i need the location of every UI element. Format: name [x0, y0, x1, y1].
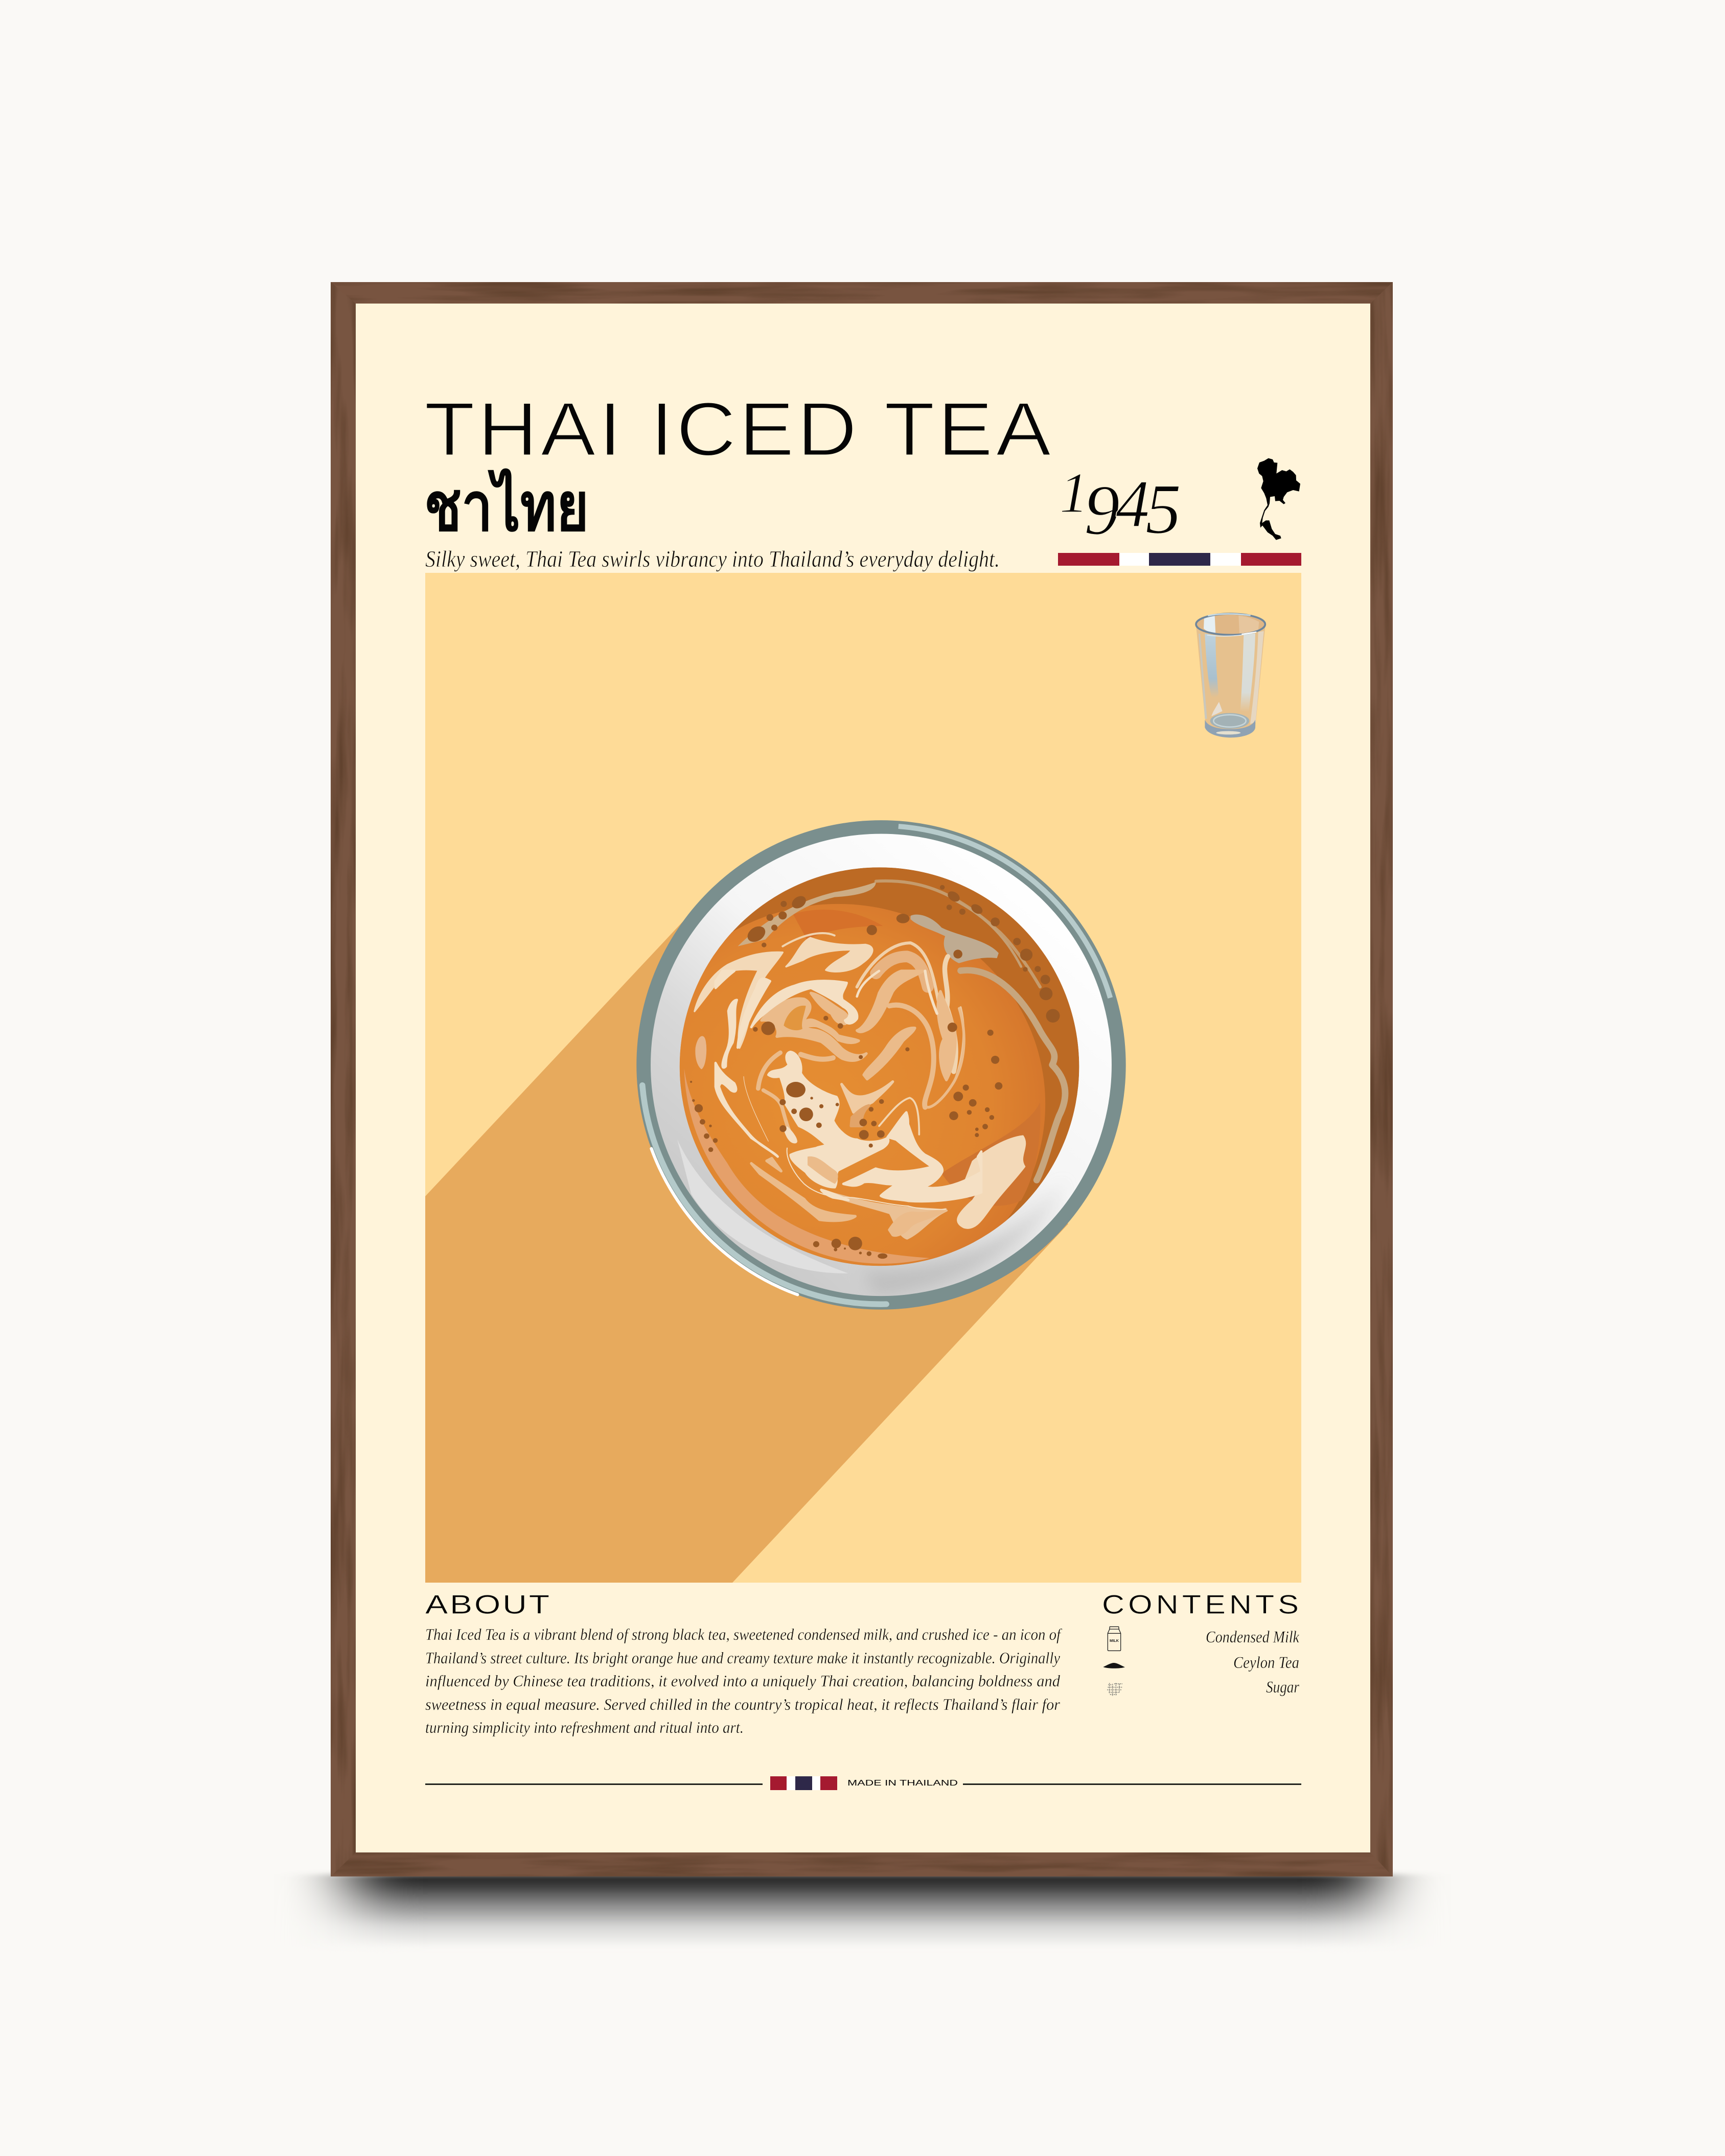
about text	[425, 1625, 1063, 1736]
contents list	[1206, 1628, 1300, 1697]
icon: tea pile	[1103, 1663, 1125, 1668]
tagline: Silky sweet, Thai Tea swirls vibrancy into Thailand’s everyday delight.	[425, 546, 1000, 572]
year: 4	[1116, 466, 1149, 541]
icon: map of Thailand	[1257, 458, 1300, 540]
tea liquid	[680, 867, 1079, 1266]
year: 5	[1145, 470, 1181, 549]
Thai title: ชาไทย	[424, 468, 589, 545]
footer flag	[770, 1776, 837, 1790]
pale bottom rim	[684, 1069, 930, 1264]
contents heading: CONTENTS	[1102, 1590, 1302, 1620]
made in Thailand label: MADE IN THAILAND	[847, 1779, 958, 1788]
central marbled swirl	[716, 971, 981, 1236]
saucer outer glass rim	[636, 820, 1126, 1310]
cream poster mat	[356, 304, 1370, 1852]
long cup shadow	[425, 887, 1068, 1583]
icon: sugar	[1107, 1683, 1123, 1696]
wooden frame	[331, 282, 1393, 1876]
flag stripe	[1058, 553, 1301, 566]
contents list: Condensed Milk	[1206, 1628, 1300, 1647]
white inner ring	[651, 834, 1112, 1296]
contents list: Ceylon Tea	[1233, 1654, 1299, 1672]
artwork panel	[425, 573, 1301, 1583]
frame drop shadow	[350, 1874, 1375, 1949]
about text: Thai Iced Tea is a vibrant blend of strong black tea, sweetened condensed milk, and crushed ice - an icon of	[425, 1625, 1063, 1643]
about text: Thailand’s street culture. Its bright orange hue and creamy texture make it instantly recognizable. Originally	[425, 1649, 1061, 1667]
about heading: ABOUT	[425, 1590, 551, 1620]
title: THAI ICED TEA	[424, 386, 1054, 472]
outer cream swirls	[695, 938, 1025, 1239]
about text: turning simplicity into refreshment and ritual into art.	[425, 1718, 744, 1736]
icon: drinking glass	[1196, 614, 1266, 737]
about text: influenced by Chinese tea traditions, it evolved into a uniquely Thai creation, balancing boldness and	[425, 1672, 1061, 1690]
lit tea surface	[680, 904, 1045, 1266]
about text: sweetness in equal measure. Served chilled in the country’s tropical heat, it reflects Thailand’s flair for	[425, 1695, 1061, 1713]
year: 9	[1084, 471, 1120, 550]
footer rule left	[425, 1783, 763, 1785]
icon: milk carton	[1108, 1627, 1121, 1651]
contents list: Sugar	[1266, 1678, 1299, 1697]
icon: milk carton: MILK	[1110, 1638, 1119, 1643]
cup illustration	[631, 820, 1126, 1310]
footer rule right	[963, 1783, 1301, 1785]
bubbles	[690, 885, 1060, 1259]
year: 1	[1060, 461, 1088, 525]
shaded tea-milk ribbons	[738, 881, 1065, 1180]
